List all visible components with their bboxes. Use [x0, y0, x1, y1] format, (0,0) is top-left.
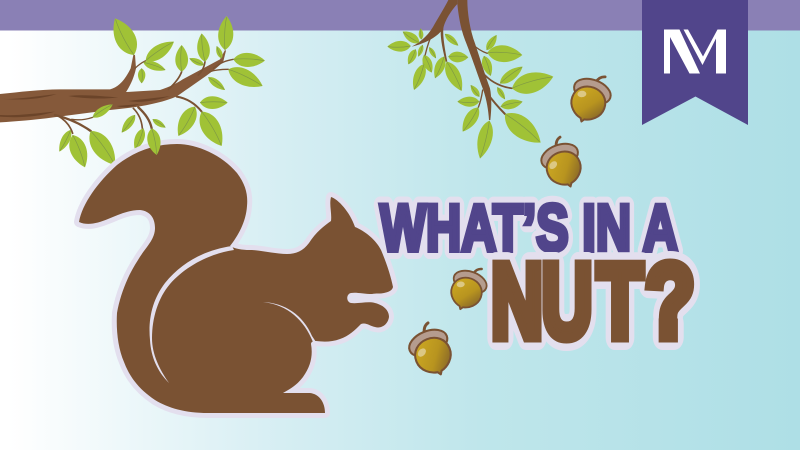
banner ribbon with logo [642, 0, 748, 125]
title: NUT?: N [491, 242, 543, 360]
squirrel silhouette [79, 144, 393, 413]
acorn top right [564, 68, 616, 128]
title: NUT?: T [597, 242, 643, 360]
acorn second [536, 133, 588, 193]
right hanging branch with leaves [387, 0, 556, 160]
title: NUT? [491, 242, 695, 360]
title: WHAT'S IN A: WHAT’S IN A [380, 190, 678, 264]
title: NUT?: ? [645, 242, 695, 360]
leaf overlapping squirrel tail [145, 127, 163, 156]
title: WHAT'S IN A: WHAT’S IN A [380, 190, 678, 264]
title: NUT?: U [542, 242, 592, 360]
title: NUT?: U [542, 242, 592, 360]
left tree branch with leaves [0, 14, 266, 170]
title: NUT?: T [597, 242, 643, 360]
title: NUT?: ? [645, 242, 695, 360]
top purple bar [0, 0, 800, 30]
acorn third [444, 261, 492, 315]
title: NUT?: N [491, 242, 543, 360]
acorn bottom [403, 318, 459, 382]
